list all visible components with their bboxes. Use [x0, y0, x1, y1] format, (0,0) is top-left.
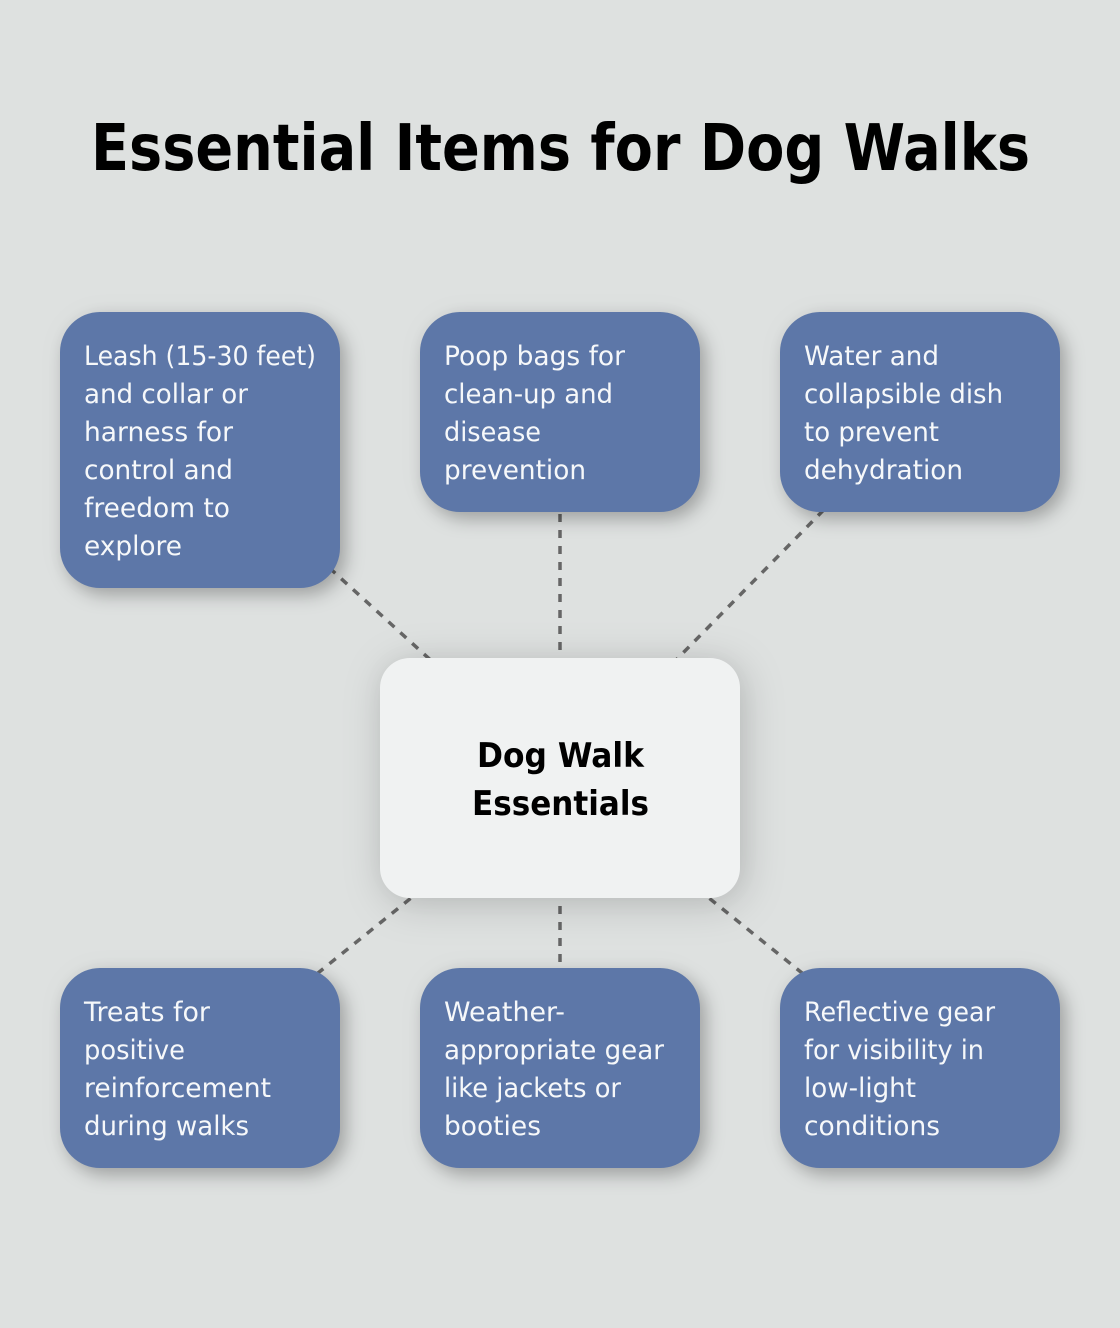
panel: center node: Dog Walk: [477, 736, 645, 776]
panel: reflective gear: [780, 968, 1060, 1168]
panel: leash: [60, 312, 340, 588]
panel: treats: Treats for: [83, 997, 210, 1028]
panel: water: [780, 312, 1060, 512]
panel: leash: Leash (15-30 feet): [84, 341, 316, 372]
panel: treats: positive: [84, 1035, 185, 1066]
panel: center node: [380, 658, 740, 898]
panel: treats: [60, 968, 340, 1168]
panel: treats: reinforcement: [84, 1073, 271, 1104]
panel: center node: Essentials: [472, 784, 649, 824]
panel: weather gear: booties: [444, 1111, 541, 1142]
panel: leash: explore: [84, 531, 182, 562]
panel: reflective gear: for visibility in: [804, 1035, 984, 1066]
panel: leash: freedom to: [84, 493, 230, 524]
panel: leash: control and: [84, 455, 233, 486]
panel: poop bags: disease: [444, 417, 541, 448]
panel: reflective gear: low-light: [804, 1073, 916, 1104]
connector lines: [200, 412, 920, 1068]
panel: treats: during walks: [84, 1111, 249, 1142]
panel: weather gear: like jackets or: [444, 1073, 621, 1104]
panel: weather gear: Weather-: [444, 997, 565, 1028]
panel: poop bags: [420, 312, 700, 512]
panel: weather gear: [420, 968, 700, 1168]
panel: reflective gear: Reflective gear: [804, 997, 995, 1028]
panel: reflective gear: conditions: [804, 1111, 940, 1142]
panel: poop bags: clean-up and: [444, 379, 613, 410]
panel: poop bags: Poop bags for: [444, 341, 625, 372]
panel: water: collapsible dish: [804, 379, 1003, 410]
panel: water: dehydration: [804, 455, 963, 486]
panel: weather gear: appropriate gear: [444, 1035, 664, 1066]
panel: leash: harness for: [84, 417, 233, 448]
panel: water: to prevent: [804, 417, 939, 448]
panel: water: Water and: [804, 341, 939, 372]
panel: poop bags: prevention: [444, 455, 586, 486]
panel: leash: and collar or: [84, 379, 248, 410]
